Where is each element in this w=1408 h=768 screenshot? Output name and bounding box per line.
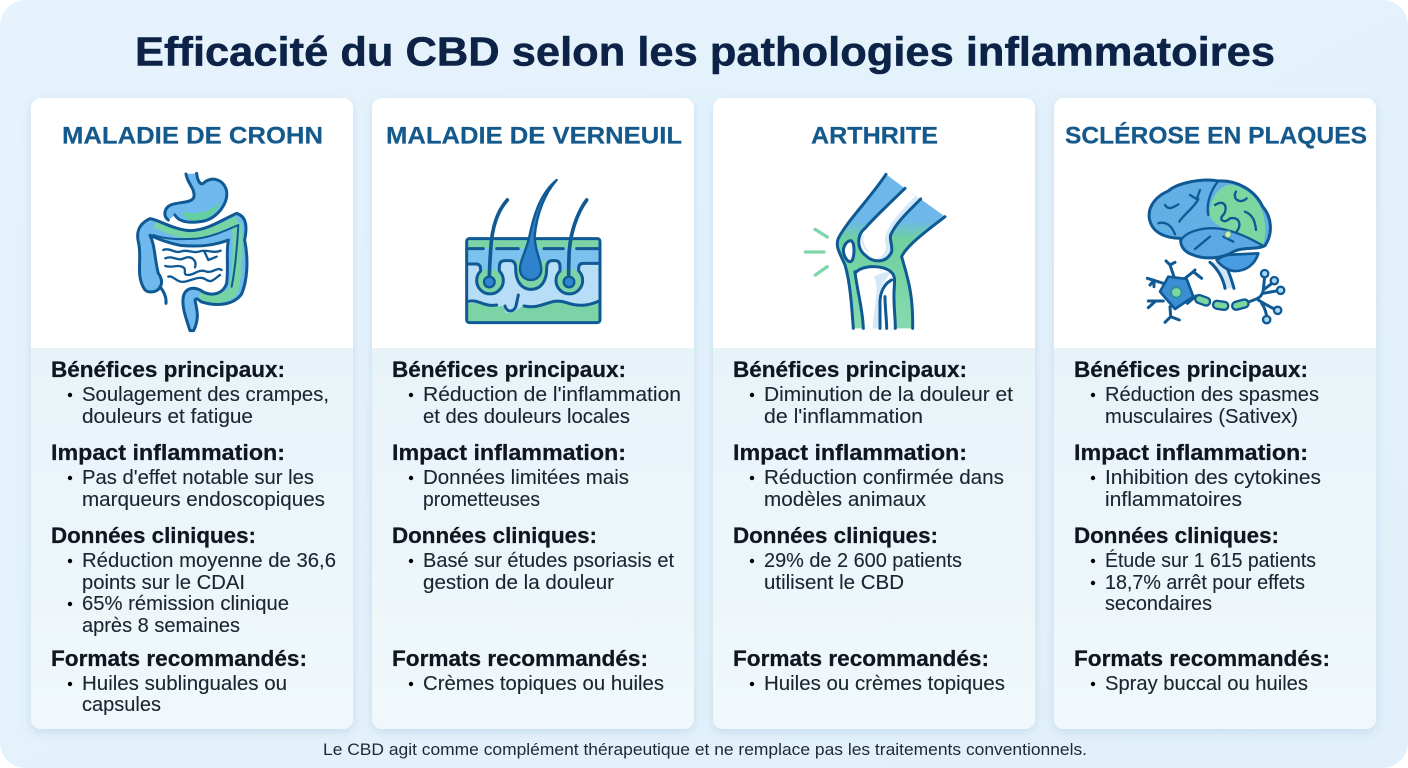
section: bénéfices principaux: Réduction des spasmes bbox=[1105, 383, 1319, 406]
section: impact inflammation bbox=[733, 440, 1004, 511]
section: données cliniques: Données cliniques: bbox=[51, 523, 256, 548]
section: données cliniques: Étude sur 1 615 patients bbox=[1105, 549, 1316, 572]
section: impact inflammation: prometteuses bbox=[423, 488, 540, 511]
section: données cliniques: Basé sur études psoriasis et bbox=[423, 549, 674, 572]
section: données cliniques bbox=[392, 523, 674, 594]
section: formats recommandés: Formats recommandés: bbox=[51, 646, 307, 671]
section: bénéfices principaux bbox=[733, 357, 1013, 428]
section: impact inflammation: Impact inflammation: bbox=[392, 440, 626, 465]
section: bénéfices principaux: Bénéfices principaux: bbox=[392, 357, 626, 382]
icon: brain and neuron bbox=[1147, 180, 1284, 323]
heading: Crohn: MALADIE DE CROHN bbox=[62, 122, 323, 150]
section: impact inflammation: Impact inflammation: bbox=[51, 440, 285, 465]
section: données cliniques: secondaires bbox=[1105, 592, 1212, 615]
section: impact inflammation: Impact inflammation: bbox=[733, 440, 967, 465]
section: données cliniques: points sur le CDAI bbox=[82, 571, 245, 594]
heading: Arthrite: ARTHRITE bbox=[811, 122, 938, 150]
section: données cliniques: Données cliniques: bbox=[733, 523, 938, 548]
section: données cliniques: 29% de 2 600 patients bbox=[764, 549, 962, 572]
section: formats recommandés: Huiles ou crèmes topiques bbox=[764, 672, 1005, 695]
section: impact inflammation: modèles animaux bbox=[764, 488, 927, 511]
section: données cliniques: 18,7% arrêt pour effets bbox=[1105, 571, 1305, 594]
section: données cliniques: Données cliniques: bbox=[1074, 523, 1279, 548]
section: données cliniques: Données cliniques: bbox=[392, 523, 597, 548]
section: bénéfices principaux: Diminution de la douleur et bbox=[764, 383, 1013, 406]
section: formats recommandés: Formats recommandés: bbox=[392, 646, 648, 671]
section: impact inflammation: inflammatoires bbox=[1105, 488, 1242, 511]
section: formats recommandés: Formats recommandés: bbox=[733, 646, 989, 671]
card background bbox=[713, 98, 1035, 729]
section: bénéfices principaux: douleurs et fatigue bbox=[82, 405, 253, 428]
heading: Sclérose en plaques: SCLÉROSE EN PLAQUES bbox=[1065, 122, 1367, 150]
section: formats recommandés: Formats recommandés: bbox=[1074, 646, 1330, 671]
icon: digestive tract bbox=[138, 173, 247, 331]
heading: Verneuil: MALADIE DE VERNEUIL bbox=[386, 122, 682, 150]
section: données cliniques: 65% rémission clinique bbox=[82, 592, 289, 615]
panel: sclérose en plaques bbox=[1054, 98, 1376, 729]
section: impact inflammation: marqueurs endoscopiques bbox=[82, 488, 325, 511]
section: données cliniques bbox=[51, 523, 336, 637]
section: données cliniques: après 8 semaines bbox=[82, 614, 240, 637]
title: Efficacité du CBD selon les pathologies inflammatoires bbox=[135, 28, 1275, 74]
section: données cliniques bbox=[733, 523, 962, 594]
section: formats recommandés bbox=[1074, 646, 1330, 695]
section: formats recommandés bbox=[51, 646, 307, 716]
section: bénéfices principaux: Soulagement des crampes, bbox=[82, 383, 329, 406]
card background bbox=[372, 98, 694, 729]
section: données cliniques: gestion de la douleur bbox=[423, 571, 614, 594]
section: données cliniques: Réduction moyenne de 36,6 bbox=[82, 549, 336, 572]
section: bénéfices principaux: Bénéfices principaux: bbox=[51, 357, 285, 382]
section: formats recommandés: capsules bbox=[82, 693, 161, 716]
section: bénéfices principaux bbox=[51, 357, 329, 428]
section: bénéfices principaux: et des douleurs locales bbox=[423, 405, 630, 428]
section: bénéfices principaux: Réduction de l'inflammation bbox=[423, 383, 681, 406]
section: formats recommandés bbox=[392, 646, 664, 695]
card background bbox=[31, 98, 353, 729]
section: formats recommandés: Huiles sublinguales ou bbox=[82, 672, 287, 695]
footer note: Le CBD agit comme complément thérapeutique et ne remplace pas les traitements conventionnels. bbox=[323, 740, 1087, 759]
panel: maladie de Verneuil bbox=[372, 98, 694, 729]
section: données cliniques: utilisent le CBD bbox=[764, 571, 904, 594]
section: bénéfices principaux: Bénéfices principaux: bbox=[733, 357, 967, 382]
card background bbox=[1054, 98, 1376, 729]
section: bénéfices principaux bbox=[1074, 357, 1319, 428]
panel: arthrite bbox=[713, 98, 1035, 729]
panel: maladie de Crohn bbox=[31, 98, 353, 729]
section: formats recommandés bbox=[733, 646, 1005, 695]
section: impact inflammation bbox=[51, 440, 325, 511]
section: bénéfices principaux: musculaires (Sativex) bbox=[1105, 405, 1298, 428]
icon: skin and hair follicles bbox=[467, 180, 600, 323]
section: bénéfices principaux: de l'inflammation bbox=[764, 405, 923, 428]
section: impact inflammation: Inhibition des cytokines bbox=[1105, 466, 1321, 489]
section: impact inflammation bbox=[1074, 440, 1321, 511]
section: bénéfices principaux bbox=[392, 357, 681, 428]
section: bénéfices principaux: Bénéfices principaux: bbox=[1074, 357, 1308, 382]
section: formats recommandés: Spray buccal ou huiles bbox=[1105, 672, 1308, 695]
icon: knee joint bbox=[805, 174, 945, 328]
section: impact inflammation bbox=[392, 440, 629, 511]
section: impact inflammation: Pas d'effet notable sur les bbox=[82, 466, 314, 489]
section: impact inflammation: Réduction confirmée dans bbox=[764, 466, 1004, 489]
section: impact inflammation: Impact inflammation: bbox=[1074, 440, 1308, 465]
section: impact inflammation: Données limitées mais bbox=[423, 466, 629, 489]
section: données cliniques bbox=[1074, 523, 1316, 615]
section: formats recommandés: Crèmes topiques ou huiles bbox=[423, 672, 664, 695]
